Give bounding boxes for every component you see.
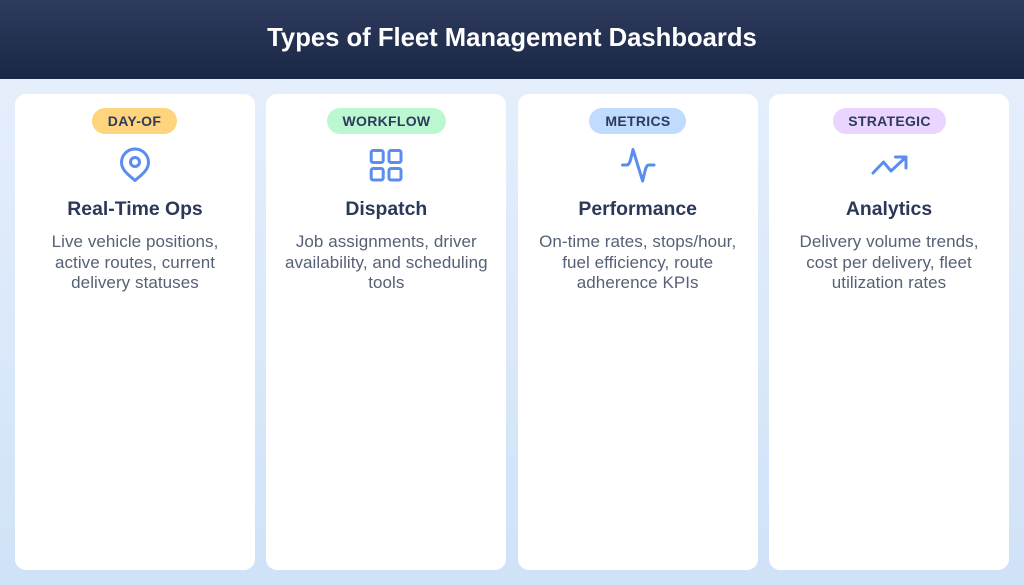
description: fuel efficiency, route [562, 252, 713, 272]
badge: DAY-OF: DAY-OF [108, 113, 161, 129]
description: Live vehicle positions, [52, 232, 218, 251]
heading: Analytics [846, 198, 932, 220]
description: Job assignments, driver [296, 232, 477, 251]
description: cost per delivery, fleet [806, 252, 972, 272]
icon: trending up [871, 155, 908, 175]
title: Types of Fleet Management Dashboards [267, 24, 757, 52]
icon: activity pulse [621, 148, 656, 182]
panel: Analytics [769, 94, 1009, 570]
badge: WORKFLOW [327, 108, 446, 134]
badge: STRATEGIC [833, 108, 946, 134]
icon: location pin [120, 148, 150, 182]
description: delivery statuses [71, 273, 199, 292]
heading: Performance [578, 198, 697, 220]
description [799, 232, 978, 292]
heading: Real-Time Ops [67, 198, 203, 220]
description: active routes, current [55, 252, 215, 272]
header banner [0, 0, 1024, 79]
panel: Dispatch [266, 94, 506, 570]
description: Delivery volume trends, [799, 232, 978, 251]
description [52, 232, 218, 292]
description: utilization rates [832, 273, 946, 292]
badge: METRICS [589, 108, 686, 134]
description [539, 232, 736, 292]
description [285, 232, 488, 292]
heading: Dispatch [345, 198, 427, 220]
panel: Performance [518, 94, 758, 570]
panel: Real-Time Ops [15, 94, 255, 570]
description: On-time rates, stops/hour, [539, 232, 736, 251]
description: adherence KPIs [577, 273, 699, 292]
description: tools [368, 273, 404, 292]
icon: grid [370, 149, 402, 182]
badge: STRATEGIC: STRATEGIC [848, 113, 931, 129]
badge: WORKFLOW: WORKFLOW [343, 113, 430, 129]
badge: METRICS: METRICS [605, 113, 671, 129]
description: availability, and scheduling [285, 252, 488, 272]
badge: DAY-OF [92, 108, 177, 134]
